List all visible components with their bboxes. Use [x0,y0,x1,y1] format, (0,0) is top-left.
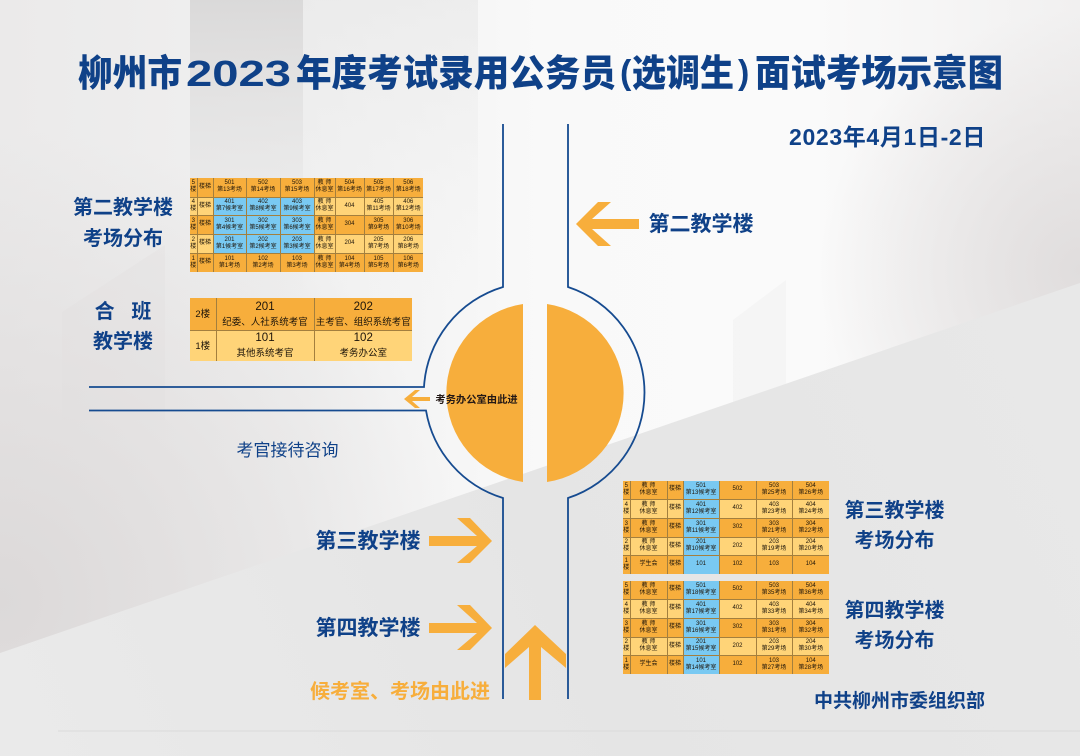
table: building two rooms: 楼 [190,224,196,230]
table: building two rooms: 第2考场 [252,263,274,269]
table: building two rooms: 305 [373,218,384,224]
table: building three rooms: 楼梯 [669,542,681,548]
arrow: to building three [429,518,492,563]
table: building two rooms: 第8考场 [398,244,419,250]
table: building four rooms: 302 [732,624,742,630]
table: building two rooms: 第5候考室 [249,224,277,230]
table: building two rooms: 5 [192,180,195,186]
table: building four rooms: 休息室 [639,608,658,614]
table: building two rooms: 楼梯 [199,202,211,208]
table: building two rooms: 第9考场 [368,224,389,230]
table: building three rooms: 第24考场 [798,508,823,514]
table: combined class building rooms: 其他系统考官 [236,348,294,359]
table: building three rooms: 4 [625,502,628,508]
table: building four rooms: 5 [625,583,628,589]
table: building three rooms: 2 [625,539,628,545]
table: building four rooms: 楼 [623,665,629,671]
table: building four rooms: 楼梯 [669,661,681,667]
table: building three rooms [623,481,829,574]
table: building four rooms: 403 [769,602,779,608]
table: building three rooms: 楼 [623,565,629,571]
arrow: to building four [429,605,492,650]
table: building four rooms: 第16候考室 [686,628,716,634]
label: combined class building: 教学楼 [93,331,153,353]
table: building four rooms: 101 [696,658,706,664]
table: building two rooms: 第12考场 [396,206,421,212]
table: building two rooms: 楼 [190,206,196,212]
label: waiting room entrance: 候考室、考场由此进 [310,681,490,703]
road outlines [89,124,644,699]
table: building two rooms: 教 师 [318,256,331,262]
table: building two rooms: 第7候考室 [216,206,243,212]
table: building two rooms [190,178,423,272]
table: building four rooms: 304 [806,620,816,626]
table: building four rooms: 第18候考室 [686,590,716,596]
table: building three rooms: 楼 [623,490,629,496]
table: building four rooms: 1 [625,658,628,664]
table: building two rooms: 101 [224,256,234,262]
table: building two rooms: 205 [373,236,384,242]
table: building three rooms: 104 [806,561,816,567]
table: building four rooms: 楼梯 [669,624,681,630]
table: building four rooms: 第31考场 [762,628,786,634]
table: building three rooms: 第20考场 [798,546,823,552]
title: 2023 [186,53,291,94]
table: building two rooms: 第15考场 [285,187,309,193]
table: building two rooms: 第3考场 [286,263,308,269]
table: building four rooms: 3 [625,620,628,626]
table: building three rooms: 103 [769,561,779,567]
table: building two rooms: 303 [292,218,302,224]
table: building four rooms: 503 [769,583,779,589]
table: building three rooms: 第12候考室 [686,508,716,514]
table: building four rooms: 第33考场 [762,608,786,614]
title: 面试考场示意图 [755,43,1003,97]
table: building four rooms: 楼 [623,628,629,634]
table: building four rooms: 104 [806,658,816,664]
table: building two rooms: 206 [403,236,413,242]
label: building three distribution [844,500,944,552]
table: combined class building rooms: 纪委、人社系统考官 [222,317,308,328]
central building semicircles [446,304,624,482]
table: building two rooms: 401 [224,199,234,205]
table: building four rooms: 休息室 [639,590,658,596]
table: building two rooms: 302 [258,218,268,224]
table: building four rooms: 休息室 [639,646,658,652]
table: building two rooms: 楼 [190,263,196,269]
label: building three: 第三教学楼 [316,530,420,553]
table: building three rooms: 第10候考室 [686,546,716,552]
table: building three rooms: 第25考场 [762,490,786,496]
label: organizer: 中共柳州市委组织部 [814,691,985,712]
table: building four rooms: 楼 [623,608,629,614]
table: building four rooms: 第14候考室 [686,665,716,671]
table: building four rooms: 楼 [623,646,629,652]
table: building three rooms: 休息室 [639,546,658,552]
table: building three rooms: 402 [732,505,742,511]
table: building two rooms: 504 [344,180,354,186]
table: building three rooms: 403 [769,502,779,508]
table: building two rooms: 405 [373,199,384,205]
table: building three rooms: 203 [769,539,779,545]
table: building four rooms: 301 [696,620,706,626]
table: building two rooms: 4 [192,199,195,205]
table: building three rooms: 304 [806,520,816,526]
table: building two rooms: 休息室 [315,187,334,193]
table: building three rooms: 休息室 [639,490,658,496]
table: building two rooms: 休息室 [315,263,334,269]
table: building two rooms: 506 [403,180,413,186]
table: building three rooms: 第26考场 [798,490,823,496]
table: building two rooms: 204 [344,240,354,246]
table: building two rooms: 3 [192,218,195,224]
table: building four rooms: 102 [732,661,742,667]
table: building four rooms: 第30考场 [798,646,823,652]
table: combined class building rooms: 102 [354,332,373,344]
arrow: office entrance [404,390,430,408]
table: combined class building rooms: 1楼 [195,340,210,352]
label: combined class building: 合 班 [95,301,151,323]
table: building four rooms: 教 师 [642,639,655,645]
table: building two rooms: 第14考场 [251,187,275,193]
table: building two rooms: 第16考场 [337,187,362,193]
table: building two rooms: 501 [224,180,234,186]
table: building two rooms: 教 师 [318,199,331,205]
table: building two rooms: 第8候考室 [249,206,277,212]
label: building four: 第四教学楼 [316,617,420,640]
table: combined class building rooms: 主考官、组织系统考官 [316,317,411,328]
table: building three rooms: 楼梯 [669,505,681,511]
table: building two rooms: 106 [403,256,413,262]
table: building two rooms: 第13考场 [217,187,242,193]
table: combined class building rooms: 2楼 [195,308,210,320]
label: building four distribution [844,600,944,652]
label: building two distribution: 第二教学楼 [73,197,173,219]
table: building two rooms: 休息室 [315,244,334,250]
table: building three rooms: 休息室 [639,528,658,534]
table: building two rooms: 402 [258,199,268,205]
table: building four rooms: 楼 [623,590,629,596]
table: building four rooms [623,581,829,674]
table: building two rooms: 第1考场 [219,263,240,269]
table: building four rooms: 第32考场 [798,628,823,634]
table: building three rooms: 第11候考室 [686,528,716,534]
arrow: entrance up [505,625,566,700]
table: building three rooms: 教 师 [642,520,655,526]
table: building three rooms: 第21考场 [762,528,786,534]
label: building two distribution: 考场分布 [83,228,163,250]
label: combined class building [93,300,153,353]
table: building two rooms: 楼梯 [199,184,211,190]
table: building four rooms: 502 [732,586,742,592]
table: building three rooms: 202 [732,542,742,548]
table: building two rooms: 2 [192,236,195,242]
table: building four rooms: 教 师 [642,583,655,589]
table: building two rooms: 403 [292,199,302,205]
table: building two rooms: 第7考场 [368,244,389,250]
table: building four rooms: 402 [732,605,742,611]
table: building four rooms: 第36考场 [798,590,823,596]
title: ( [620,54,632,92]
table: building two rooms: 楼梯 [199,240,211,246]
table: building four rooms: 2 [625,639,628,645]
title: 选调生 [632,43,734,97]
label: building two distribution [73,196,173,250]
table: building three rooms: 楼梯 [669,486,681,492]
table: building two rooms: 203 [292,236,302,242]
table: building three rooms: 404 [806,502,816,508]
label: building three distribution: 第三教学楼 [844,500,944,522]
table: building two rooms: 502 [258,180,268,186]
table: building two rooms: 教 师 [318,180,331,186]
table: building two rooms: 503 [292,180,302,186]
table: building two rooms: 104 [344,256,354,262]
table: building two rooms: 306 [403,218,413,224]
table: building four rooms: 303 [769,620,779,626]
table: building two rooms: 第1候考室 [216,244,243,250]
date: 2023年4月1日-2日 [789,124,986,150]
table: building three rooms: 502 [732,486,742,492]
table: building two rooms: 楼 [190,244,196,250]
label: building four distribution: 考场分布 [854,630,934,652]
table: building three rooms: 学生会 [639,561,658,567]
table: building three rooms: 1 [625,558,628,564]
table: building three rooms: 楼 [623,528,629,534]
table: building two rooms: 406 [403,199,413,205]
table: building four rooms: 楼梯 [669,586,681,592]
table: combined class building rooms [190,298,412,361]
table: building four rooms: 第15候考室 [686,646,716,652]
table: building two rooms: 202 [258,236,268,242]
table: building three rooms: 204 [806,539,816,545]
table: building two rooms: 休息室 [315,206,334,212]
table: building two rooms: 第18考场 [396,187,421,193]
table: building four rooms: 第29考场 [762,646,786,652]
table: building two rooms: 教 师 [318,218,331,224]
table: building four rooms: 504 [806,583,816,589]
table: building four rooms: 203 [769,639,779,645]
table: building three rooms: 第23考场 [762,508,786,514]
table: building four rooms: 第28考场 [798,665,823,671]
table: combined class building rooms: 考务办公室 [339,348,387,359]
table: building three rooms: 201 [696,539,706,545]
table: building two rooms: 201 [224,236,234,242]
label: examiner reception: 考官接待咨询 [236,441,338,460]
table: building two rooms: 第5考场 [368,263,389,269]
table: building four rooms: 201 [696,639,706,645]
table: building two rooms: 第6候考室 [283,224,311,230]
table: building four rooms: 教 师 [642,602,655,608]
table: building two rooms: 第3候考室 [283,244,311,250]
table: building two rooms: 休息室 [315,224,334,230]
table: building four rooms: 第17候考室 [686,608,716,614]
table: building three rooms: 501 [696,483,706,489]
table: building four rooms: 103 [769,658,779,664]
table: building three rooms: 302 [732,524,742,530]
table: building two rooms: 304 [344,221,354,227]
table: building two rooms: 教 师 [318,236,331,242]
table: building two rooms: 第2候考室 [249,244,277,250]
table: building four rooms: 404 [806,602,816,608]
table: building two rooms: 103 [292,256,302,262]
table: combined class building rooms: 202 [354,301,373,313]
title: ) [738,54,749,92]
table: building three rooms: 楼 [623,508,629,514]
table: building two rooms: 楼梯 [199,221,211,227]
table: building four rooms: 501 [696,583,706,589]
table: building two rooms: 1 [192,256,195,262]
table: building four rooms: 休息室 [639,628,658,634]
title: 柳州市 [78,43,182,97]
table: building three rooms: 503 [769,483,779,489]
table: building three rooms: 第19考场 [762,546,786,552]
table: building two rooms: 楼 [190,187,196,193]
arrow: to building two [576,202,639,246]
table: building two rooms: 105 [373,256,384,262]
table: building two rooms: 102 [258,256,268,262]
table: building four rooms: 4 [625,602,628,608]
table: building four rooms: 第27考场 [762,665,786,671]
table: building three rooms: 楼梯 [669,524,681,530]
table: building two rooms: 第17考场 [366,187,391,193]
table: building two rooms: 楼梯 [199,259,211,265]
table: combined class building rooms: 101 [255,332,275,344]
table: building three rooms: 101 [696,561,706,567]
table: building three rooms: 401 [696,502,706,508]
table: building three rooms: 教 师 [642,502,655,508]
table: building two rooms: 第4候考室 [216,224,243,230]
table: building four rooms: 学生会 [639,661,658,667]
table: building four rooms: 204 [806,639,816,645]
table: building three rooms: 教 师 [642,483,655,489]
table: building four rooms: 楼梯 [669,642,681,648]
table: building three rooms: 第13候考室 [686,490,716,496]
table: building four rooms: 教 师 [642,620,655,626]
label: building three distribution: 考场分布 [854,530,934,552]
table: building three rooms: 301 [696,520,706,526]
title: 年度考试录用公务员 [296,43,616,97]
label: building four distribution: 第四教学楼 [844,600,944,622]
label: building two: 第二教学楼 [648,213,754,236]
table: building two rooms: 404 [344,202,354,208]
table: building four rooms: 第34考场 [798,608,823,614]
table: building three rooms: 5 [625,483,628,489]
table: building three rooms: 504 [806,483,816,489]
table: building two rooms: 第11考场 [366,206,391,212]
table: building four rooms: 第35考场 [762,590,786,596]
table: building three rooms: 休息室 [639,508,658,514]
table: building four rooms: 楼梯 [669,605,681,611]
table: building two rooms: 505 [373,180,384,186]
table: building two rooms: 第9候考室 [283,206,311,212]
table: combined class building rooms: 201 [255,301,275,313]
table: building three rooms: 教 师 [642,539,655,545]
table: building four rooms: 202 [732,642,742,648]
table: building three rooms: 3 [625,520,628,526]
table: building three rooms: 303 [769,520,779,526]
table: building three rooms: 第22考场 [798,528,823,534]
table: building two rooms: 第10考场 [396,224,421,230]
table: building two rooms: 第4考场 [339,263,360,269]
table: building four rooms: 401 [696,602,706,608]
office entrance label: 考务办公室由此进 [435,395,518,406]
table: building three rooms: 楼梯 [669,561,681,567]
table: building three rooms: 102 [732,561,742,567]
table: building two rooms: 第6考场 [398,263,419,269]
table: building three rooms: 楼 [623,546,629,552]
table: building two rooms: 301 [224,218,234,224]
